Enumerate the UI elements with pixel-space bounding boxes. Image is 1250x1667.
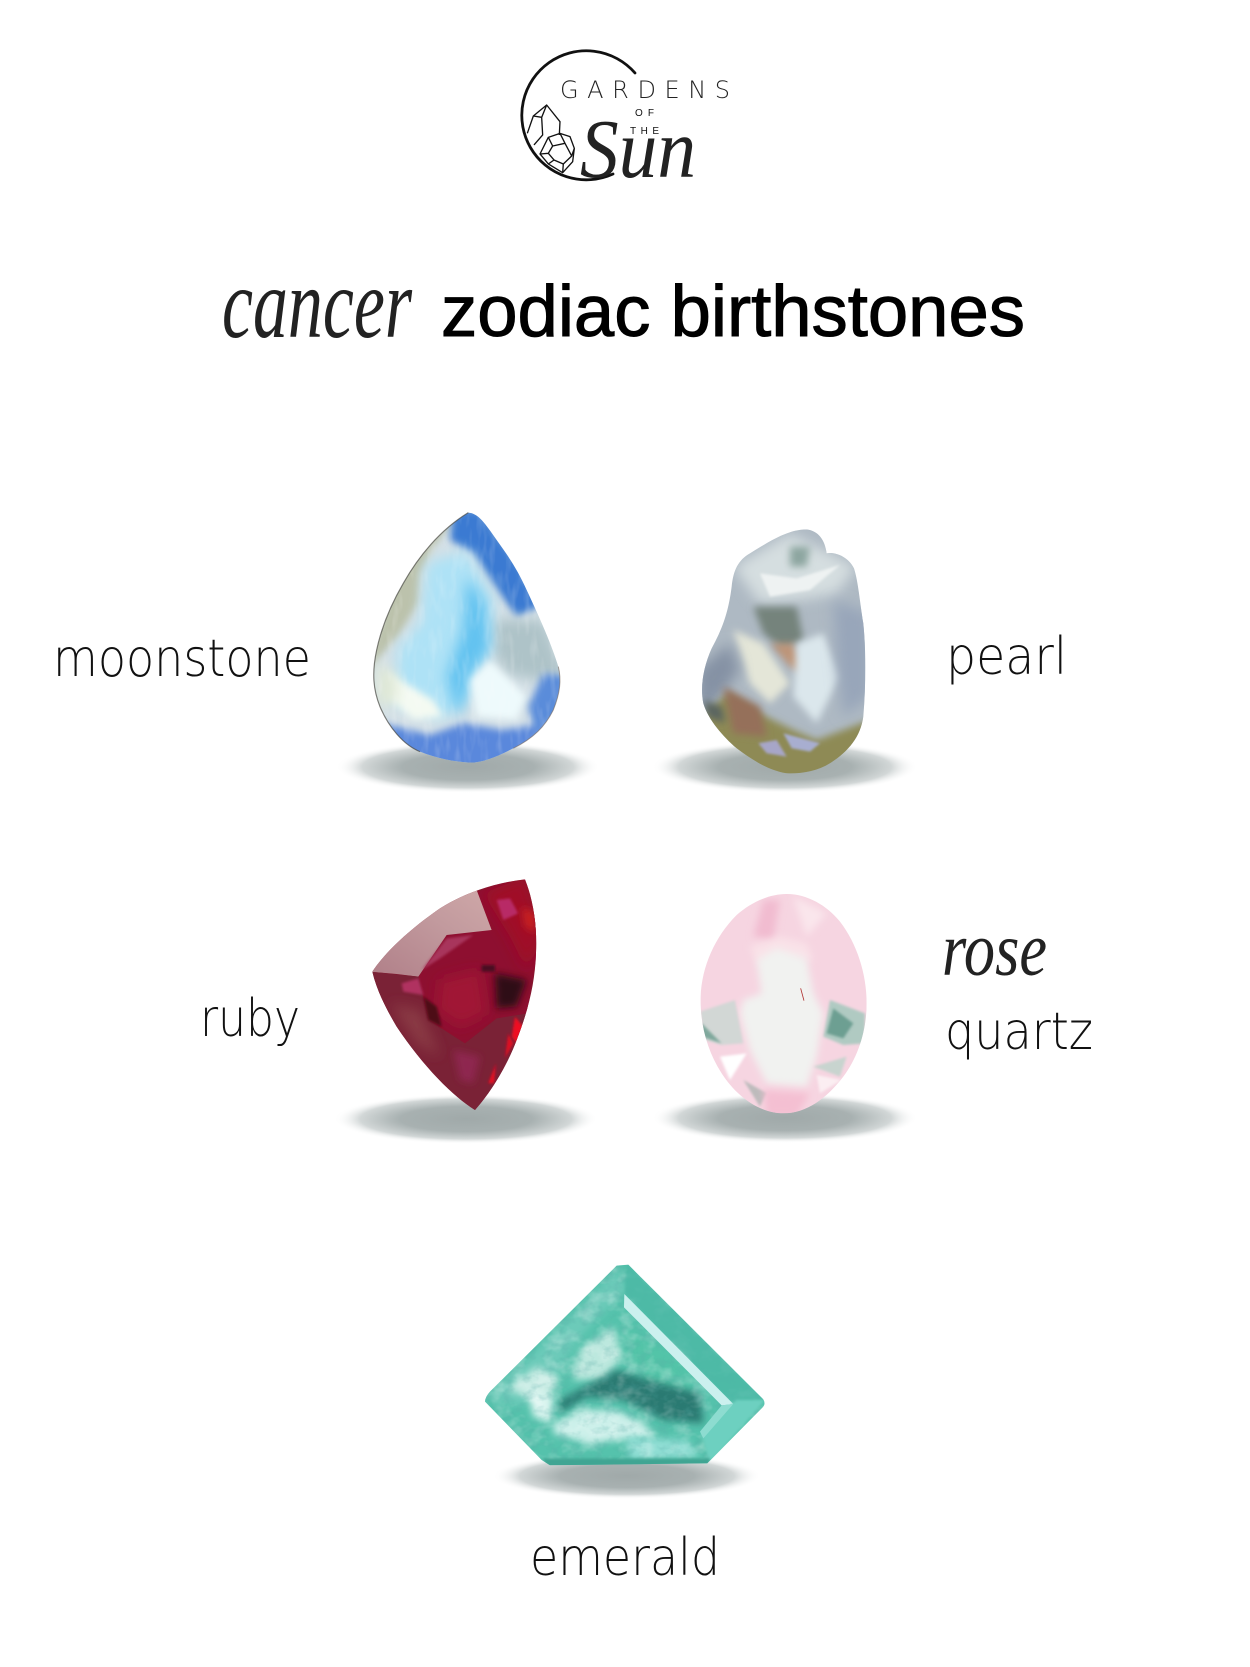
moonstone label: moonstone: [53, 629, 311, 689]
logo wordmark GARDENS: GARDENS: [560, 76, 730, 104]
emerald shadow: [493, 1453, 761, 1499]
ruby shadow: [334, 1094, 598, 1144]
icon: emerald gem: [480, 1260, 770, 1470]
logo word OF: OF: [635, 108, 654, 119]
pearl group: [652, 523, 1067, 793]
title script word: cancer: [222, 248, 413, 359]
icon: moonstone gem: [373, 512, 560, 762]
emerald label: emerald: [530, 1528, 720, 1588]
ruby group: [200, 877, 598, 1144]
title main text: zodiac birthstones: [441, 272, 1025, 352]
icon: rose quartz gem: [697, 890, 870, 1117]
pearl shadow: [652, 741, 918, 793]
ruby label: ruby: [200, 989, 300, 1049]
title: [222, 248, 1025, 359]
logo: Gardens of the Sun: [522, 51, 730, 196]
rose quartz group: [652, 890, 1093, 1143]
rose label: rose: [942, 908, 1047, 992]
logo word THE: THE: [630, 126, 659, 137]
moonstone group: [53, 503, 600, 793]
quartz label: quartz: [945, 1002, 1093, 1062]
icon: ruby gem: [372, 879, 536, 1110]
emerald group: [480, 1260, 770, 1588]
logo script word Sun: Sun: [580, 103, 696, 196]
moonstone shadow: [336, 741, 600, 793]
icon: pearl gem: [702, 530, 866, 774]
rose quartz shadow: [652, 1093, 918, 1143]
pearl label: pearl: [946, 627, 1067, 687]
logo crystals icon: [527, 105, 574, 173]
logo ring: [522, 51, 635, 180]
